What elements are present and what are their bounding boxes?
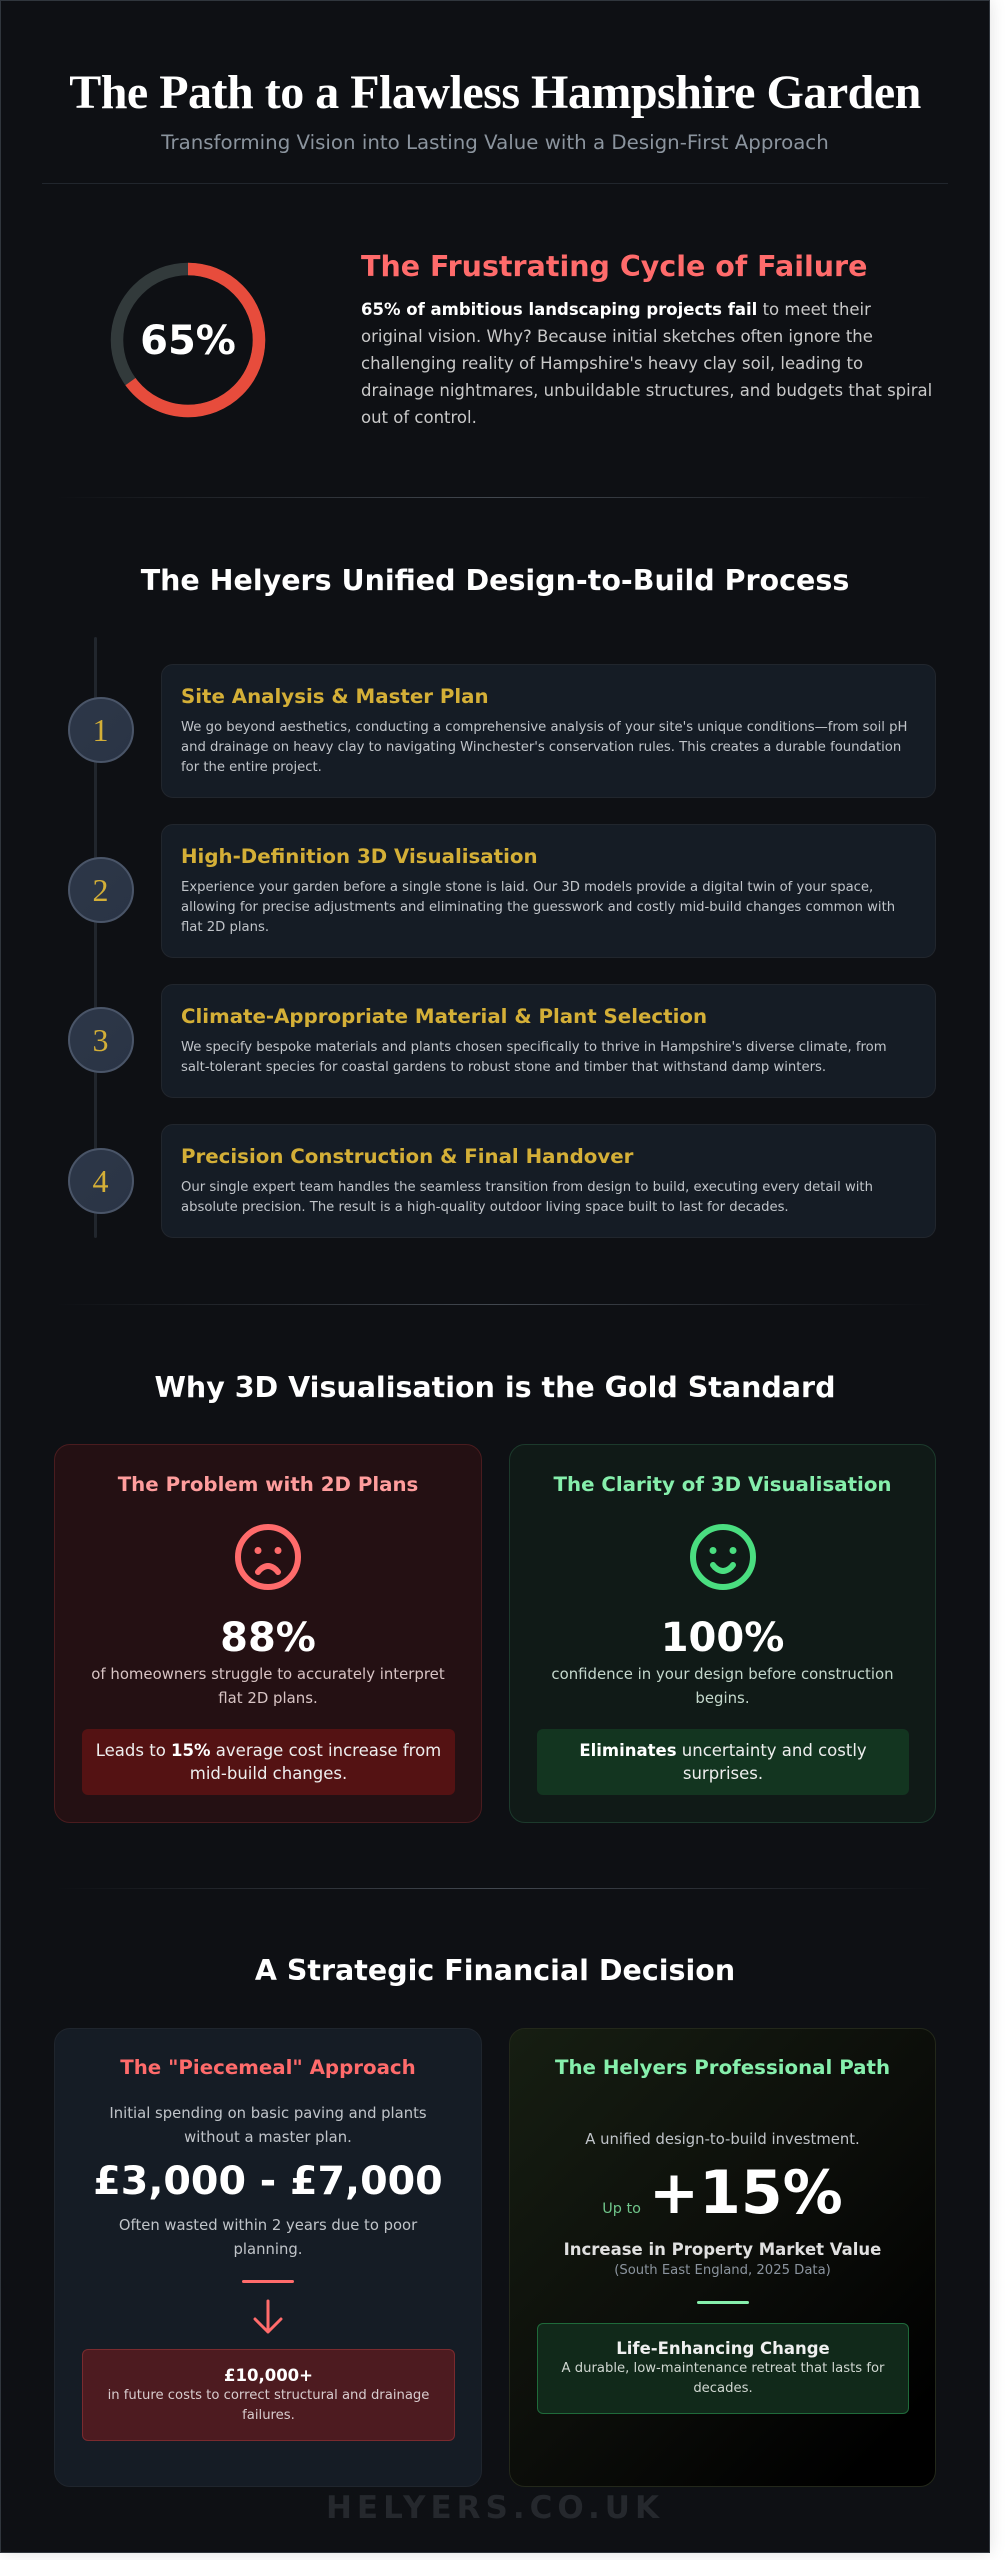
step 3 number: 3 [92,1022,108,1058]
step 1 text: for the entire project. [181,760,322,775]
callout: 15% cost increase: mid-build changes. [190,1764,347,1783]
step 2 card [161,824,936,958]
callout: life-enhancing change [537,2323,909,2414]
step 4 text [181,1180,873,1215]
callout: future costs [82,2349,455,2441]
step 4 text: absolute precision. The result is a high-quality outdoor living space built to last for decades. [181,1200,789,1215]
wasted text: planning. [234,2240,302,2258]
future cost text: in future costs to correct structural and drainage [108,2388,429,2403]
step 1 text: and drainage on heavy clay to navigating Winchester's conservation rules. This creates a durable foundation [181,740,901,755]
callout text: A durable, low-maintenance retreat that lasts for [562,2361,884,2376]
step 3 number [68,1007,134,1073]
step 1 title: Site Analysis & Master Plan [181,685,489,708]
stat label: Increase in Property Market Value [564,2240,881,2259]
subtitle: Transforming Vision into Lasting Value with a Design-First Approach [161,131,829,154]
step 4 card [161,1124,936,1238]
paragraph: failure [361,300,932,427]
heading: 3D visualisation: Why 3D Visualisation is the Gold Standard [154,1371,836,1404]
panel title: The Clarity of 3D Visualisation [554,1473,892,1496]
step 3 text [181,1040,887,1075]
step 4 number [68,1148,134,1214]
step 2 text: Experience your garden before a single stone is laid. Our 3D models provide a digital twin of your space, [181,880,873,895]
intro text: Initial spending on basic paving and plants [109,2105,427,2122]
stat: up to +15%: Up to+15% [602,2158,843,2228]
paragraph: failure: out of control. [361,408,477,427]
panel title: The "Piecemeal" Approach [120,2056,416,2079]
future cost text [108,2388,429,2423]
panel title: The Helyers Professional Path [555,2056,890,2079]
step 3 card [161,984,936,1098]
intro text: without a master plan. [184,2128,352,2146]
step 1 text: We go beyond aesthetics, conducting a comprehensive analysis of your site's unique conditions—from soil pH [181,720,907,735]
icon: sad face [235,1524,301,1590]
step 2 number: 2 [92,872,108,908]
panel: cycle of failure [361,250,932,427]
paragraph: failure: drainage nightmares, unbuildable structures, and budgets that spiral [361,381,932,400]
heading: financial decision: A Strategic Financial Decision [255,1954,735,1987]
wasted text [119,2217,418,2258]
step 2 text [181,880,895,935]
callout text: decades. [693,2381,753,2396]
panel title: The Problem with 2D Plans [118,1473,418,1496]
paragraph: failure: challenging reality of Hampshire's heavy clay soil, leading to [361,354,863,373]
heading: failure: The Frustrating Cycle of Failure [361,250,867,283]
intro text: A unified design-to-build investment. [585,2131,860,2148]
step 4 text: Our single expert team handles the seamless transition from design to build, executing every detail with [181,1180,873,1195]
donut chart: 65%: 65% [140,318,236,364]
stat: 100%: 100% [661,1615,784,1661]
arrow: down [253,2300,283,2334]
callout text [562,2361,884,2396]
callout: 15% cost increase [82,1729,455,1795]
accent bar [242,2280,294,2283]
stat text: of homeowners struggle to accurately interpret [91,1665,445,1683]
timeline line [94,637,97,1238]
stat text [551,1665,894,1706]
panel: problem with 2D plans [54,1444,482,1823]
callout: 15% cost increase: Leads to 15% average cost increase from [96,1741,441,1760]
accent bar [697,2301,749,2304]
callout: eliminates uncertainty: Eliminates uncertainty and costly [579,1741,867,1760]
stat text: confidence in your design before construction [551,1665,894,1683]
heading: process: The Helyers Unified Design-to-Build Process [141,564,849,597]
title: The Path to a Flawless Hampshire Garden [69,66,921,119]
stat text: flat 2D plans. [218,1688,318,1706]
price: £3,000 - £7,000 [93,2158,443,2204]
step 3 text: salt-tolerant species for coastal gardens to robust stone and timber that withstand damp winters. [181,1060,826,1075]
stat text: begins. [695,1688,750,1706]
donut chart: 65% [110,262,266,418]
panel: professional path [509,2028,936,2487]
callout title: Life-Enhancing Change [616,2339,830,2358]
stat source: (South East England, 2025 Data) [614,2263,831,2278]
step 2 text: flat 2D plans. [181,920,269,935]
step 3 title: Climate-Appropriate Material & Plant Selection [181,1005,707,1028]
callout: eliminates uncertainty [537,1729,909,1795]
stat: 88%: 88% [220,1615,316,1661]
step 2 text: allowing for precise adjustments and eliminating the guesswork and costly mid-build changes common with [181,900,895,915]
step 4 number: 4 [92,1163,108,1199]
step 4 title: Precision Construction & Final Handover [181,1145,633,1168]
paragraph: failure: 65% of ambitious landscaping projects fail to meet their [361,300,871,319]
footer brand: HELYERS.CO.UK [326,2490,664,2526]
future cost figure: £10,000+ [224,2366,313,2385]
panel: clarity of 3D visualisation [509,1444,936,1823]
stat text [91,1665,445,1706]
callout: eliminates uncertainty: surprises. [683,1764,763,1783]
panel: piecemeal approach [54,2028,482,2487]
future cost text: failures. [242,2408,295,2423]
wasted text: Often wasted within 2 years due to poor [119,2217,417,2234]
step 1 number [68,697,134,763]
paragraph: failure: original vision. Why? Because initial sketches often ignore the [361,327,873,346]
step 1 number: 1 [92,712,108,748]
step 1 text [181,720,907,775]
step 2 title: High-Definition 3D Visualisation [181,845,538,868]
step 1 card [161,664,936,798]
step 3 text: We specify bespoke materials and plants chosen specifically to thrive in Hampshire's diverse climate, from [181,1040,887,1055]
intro text [109,2105,427,2146]
icon: happy face [690,1524,756,1590]
step 2 number [68,857,134,923]
